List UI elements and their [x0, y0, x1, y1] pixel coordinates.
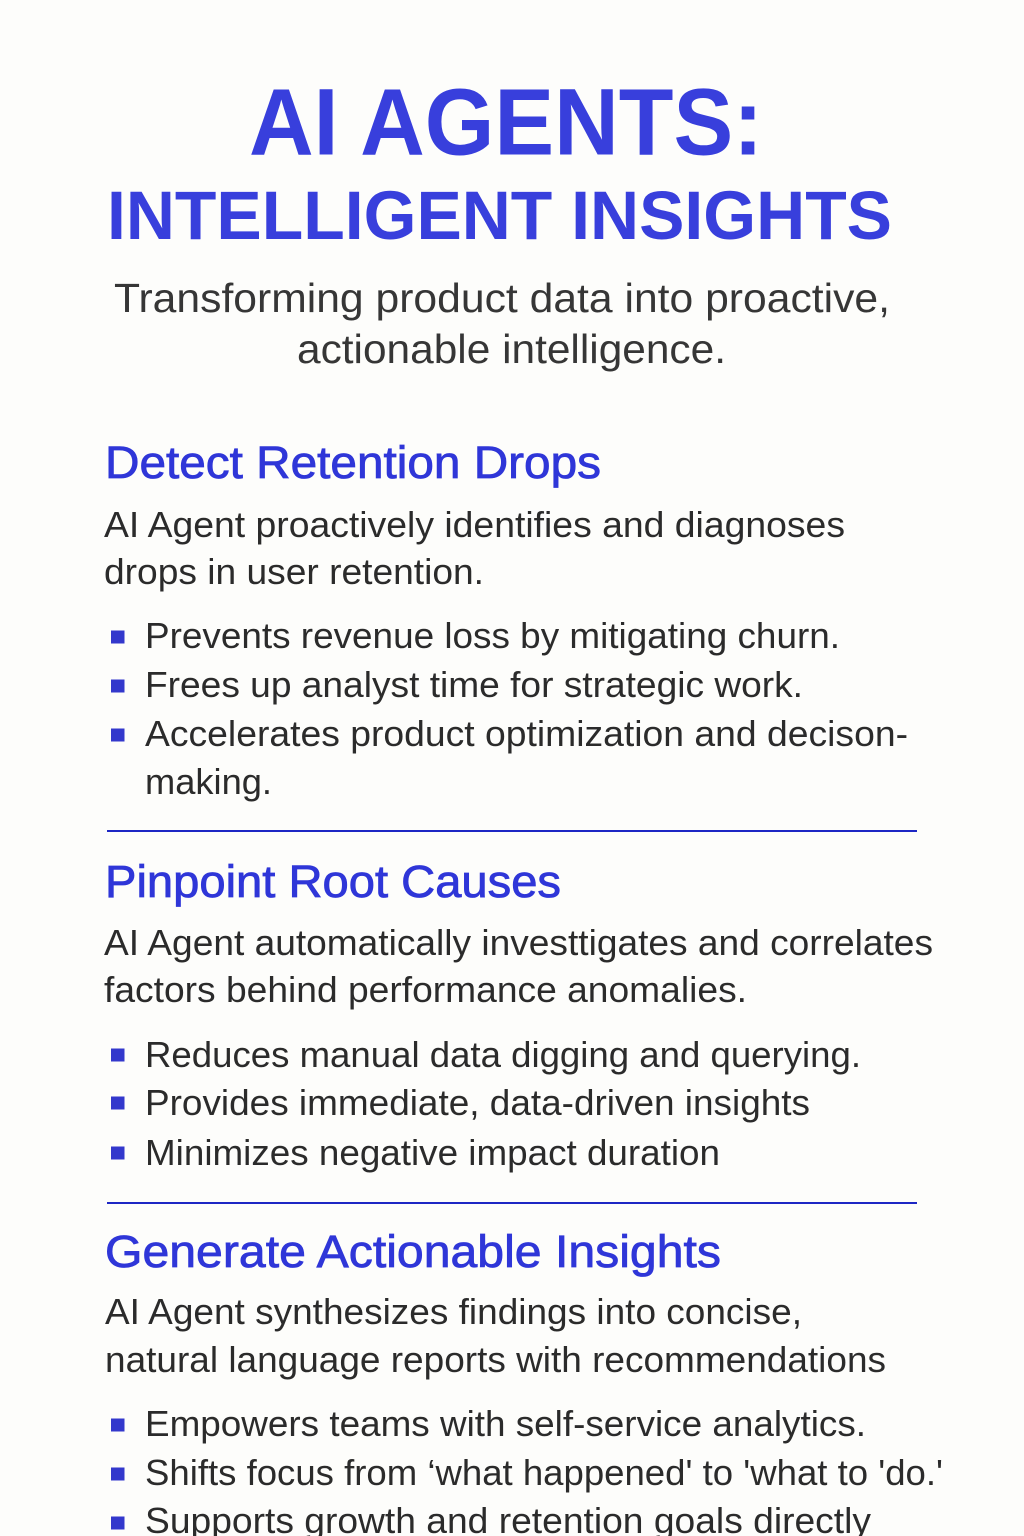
panel: pinpoint root causes: [104, 856, 933, 1173]
description: detect retention drops: [104, 504, 845, 592]
bullet list: detect retention drops: [111, 615, 908, 802]
heading: detect retention drops: Detect Retention Drops: [105, 437, 601, 488]
bullet list: generate actionable insights: [111, 1403, 943, 1536]
description: generate actionable insights: [105, 1291, 886, 1380]
title: AI AGENTS:: [249, 70, 763, 176]
description: pinpoint root causes: factors behind performance anomalies.: [104, 969, 747, 1010]
bullet list: pinpoint root causes: [111, 1034, 861, 1173]
panel: generate actionable insights: [105, 1226, 943, 1536]
bullet list: pinpoint root causes: Provides immediate, data-driven insights: [145, 1082, 810, 1123]
bullet list: detect retention drops: Prevents revenue loss by mitigating churn.: [145, 615, 840, 656]
description: detect retention drops: AI Agent proactively identifies and diagnoses: [104, 504, 845, 545]
subtitle: Transforming product data into proactive,: [114, 275, 890, 321]
description: generate actionable insights: natural language reports with recommendations: [105, 1339, 886, 1380]
bullet list: detect retention drops: making.: [145, 761, 272, 802]
bullet list: detect retention drops: Accelerates product optimization and decison-: [145, 713, 908, 754]
description: generate actionable insights: AI Agent synthesizes findings into concise,: [105, 1291, 802, 1332]
description: pinpoint root causes: [104, 922, 933, 1010]
description: pinpoint root causes: AI Agent automatically investtigates and correlates: [104, 922, 933, 963]
bullet list: detect retention drops: Frees up analyst time for strategic work.: [145, 664, 803, 705]
bullet list: generate actionable insights: Empowers teams with self-service analytics.: [145, 1403, 866, 1444]
bullet list: pinpoint root causes: Reduces manual data digging and querying.: [145, 1034, 861, 1075]
title: [107, 70, 892, 254]
panel: detect retention drops: [104, 437, 908, 802]
description: detect retention drops: drops in user retention.: [104, 551, 484, 592]
bullet list: generate actionable insights: Shifts focus from ‘what happened' to 'what to 'do.': [145, 1452, 943, 1493]
heading: generate actionable insights: Generate Actionable Insights: [105, 1226, 721, 1277]
subtitle: [114, 275, 890, 372]
subtitle: actionable intelligence.: [297, 326, 726, 372]
bullet list: pinpoint root causes: Minimizes negative impact duration: [145, 1132, 720, 1173]
heading: pinpoint root causes: Pinpoint Root Causes: [105, 856, 561, 907]
title: INTELLIGENT INSIGHTS: [107, 177, 892, 254]
